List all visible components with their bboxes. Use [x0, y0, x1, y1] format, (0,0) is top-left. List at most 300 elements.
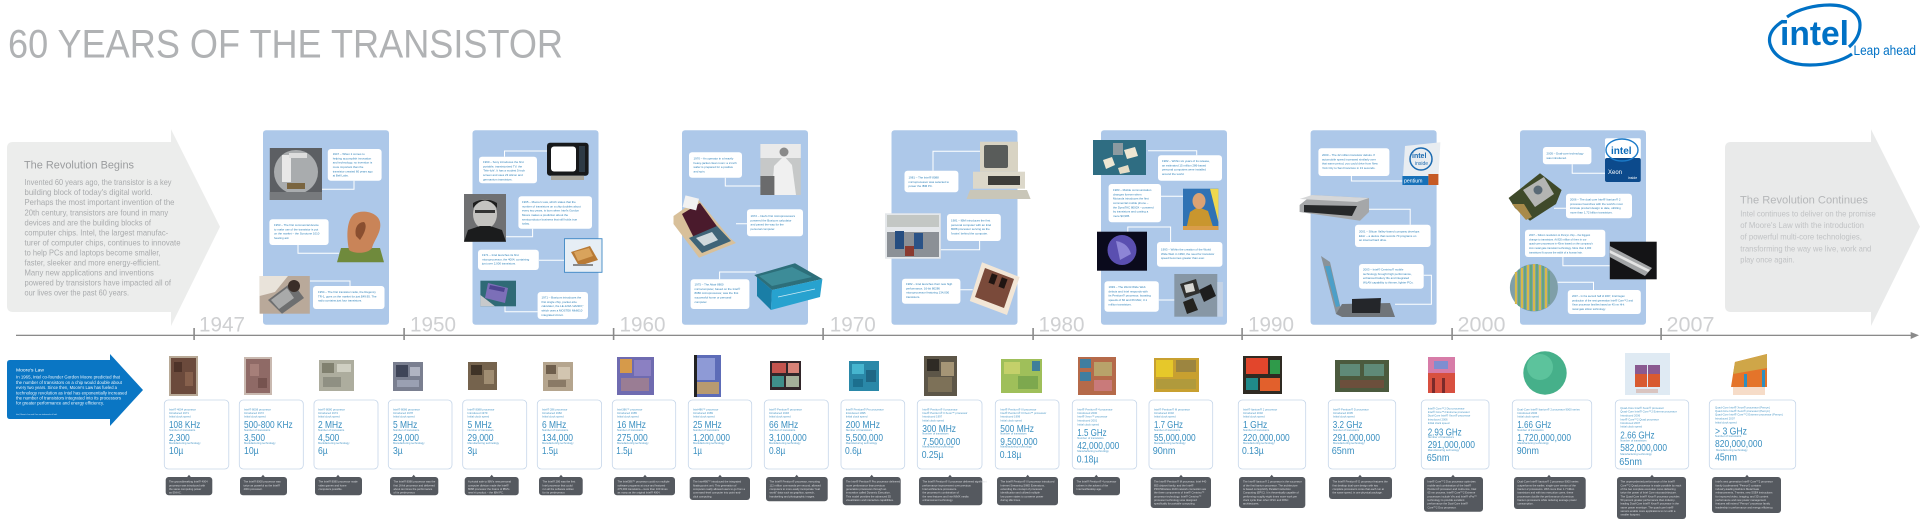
card: Pentium II: Intel® Pentium® II Xeon™ processor	[922, 411, 968, 415]
panel: The Revolution Begins arrow	[7, 129, 220, 326]
text: 1970: and spin.	[694, 169, 705, 173]
note: 386: as many as the original Intel® 4004.	[618, 491, 661, 495]
text: 1981 IBM: personal computer with an Intel	[951, 223, 992, 227]
note: 286: Intel processor that could	[542, 483, 573, 487]
card: Pentium: Intel® Pentium® processor	[769, 407, 802, 411]
card: Intel 8088	[463, 400, 527, 469]
card: Quad-Core Xeon: 2.66 GHz	[1620, 430, 1655, 442]
text: 1971 Busicom: which uses a MOSTEK Mk6010	[542, 308, 583, 312]
note: 8088: computer division made the Intel®	[468, 483, 509, 487]
text: 2001: an internal hard drive.	[1359, 238, 1387, 242]
text: 1983 mobile: mere $3,995.	[1113, 214, 1130, 218]
card: Intel 8008: Introduced 1972	[244, 411, 264, 415]
text: 1993 web: speed becomes greater than ever.	[1161, 256, 1205, 260]
text: 1993 Pentium: its Pentium® processor, boasting	[1108, 294, 1151, 298]
note: Quad-Core: of the two complete execution cores delivering	[1620, 487, 1676, 491]
panel: 1960-1970 events	[674, 130, 822, 325]
card: Intel386: Initial clock speed	[617, 415, 639, 419]
note: Core 2 Duo: technology to provide excellent	[1428, 498, 1465, 502]
text: 1993 Pentium: debuts and Intel responds with	[1108, 289, 1148, 293]
note: 8080: computers possible.	[318, 487, 343, 491]
card: Core 2 Duo: 2.93 GHz	[1428, 428, 1462, 438]
card: Pentium M: 90nm	[1153, 446, 1175, 457]
card: Quad-Core Xeon: 582,000,000	[1620, 443, 1667, 454]
card: Pentium Pro: Initial clock speed	[846, 415, 868, 419]
panel: The Revolution Continues arrow: of Moore's Law with the introduction	[1740, 221, 1864, 230]
chip: 8008 die	[244, 357, 272, 395]
card: Intel 8088: 29,000	[468, 433, 494, 444]
text: 1965: semiconductor business that still holds true	[522, 217, 578, 221]
card: Pentium D: 291,000,000	[1333, 433, 1380, 444]
card: Pentium M: 1.7 GHz	[1154, 420, 1183, 431]
card: Itanium 2: Intel® Itanium® 2 processor	[1243, 407, 1277, 411]
card: Quad-Core Xeon	[1615, 400, 1689, 469]
card: Pentium 4: Initial clock speed	[1077, 422, 1099, 426]
card: Penryn: 820,000,000	[1715, 439, 1763, 450]
card: Itanium 2 9000: Dual-Core Intel® Itanium® 2 processor 9000 series	[1517, 407, 1580, 411]
timeline axis with year ticks: 1947	[199, 313, 245, 337]
note: Pentium III: The Intel® Pentium® III processor introduced	[1000, 480, 1055, 484]
text: 2007 Penryn: quad-core processors in 45nm based on the company's	[1529, 242, 1593, 246]
text: 1975: successful home or personal	[694, 295, 732, 299]
card: Intel 286: Initial clock speed	[542, 415, 564, 419]
panel: The Revolution Begins arrow: devices and are the building blocks of	[24, 218, 152, 227]
panel: The Revolution Begins arrow: building block of today's digital world.	[24, 188, 152, 197]
card: Pentium: Manufacturing technology	[769, 441, 801, 445]
text: 1953	[269, 219, 329, 245]
note: Pentium III: Internet Streaming SIMD Extensions,	[1000, 483, 1045, 487]
note: Core 2 Duo: mobile and combination of the Intel®	[1428, 483, 1471, 487]
note: Penryn: family (codenamed "Penryn") contains	[1716, 483, 1762, 487]
note: Itanium 2	[1239, 475, 1305, 508]
card: Intel386: 1.5µ	[616, 446, 632, 457]
card: Intel386: 16 MHz	[617, 420, 646, 431]
note: Pentium D	[1329, 475, 1392, 499]
card: Intel386: Number of transistors	[617, 428, 644, 432]
text: 1982 286: 1982 – Within six years of its release,	[1162, 159, 1210, 163]
note: Pentium Pro	[843, 475, 901, 505]
panel: Moore's Law arrow: the number of transistors integrated into its processors	[16, 396, 122, 401]
card: Pentium D: Intel® Pentium® D processor	[1333, 407, 1369, 411]
card: Core 2 Duo: 291,000,000	[1428, 440, 1475, 451]
card: Penryn: Manufacturing technology	[1716, 448, 1748, 452]
text: 2003: enhanced battery life and integrated	[1363, 276, 1410, 280]
photo: first transistor replica	[270, 148, 322, 200]
card: Pentium II: 300 MHz	[922, 424, 956, 435]
note: Pentium Pro: This model provides the advanced 3D	[846, 494, 891, 498]
note: Pentium M: processor technology. Intel® Centrino™	[1154, 494, 1202, 498]
note: Itanium 2 9000: Dual-Core Intel® Itanium® 2 processor 9000 series	[1518, 480, 1579, 484]
photo: Sony TV	[547, 143, 589, 180]
text: 1982 286: around the world.	[1162, 172, 1185, 176]
text: 1947: more important than the	[333, 165, 364, 169]
panel: The Revolution Continues arrow: of powerful multi-core technologies,	[1740, 233, 1862, 242]
note: Core 2 Duo: Pentium® processor and multi-core, Intel	[1428, 487, 1477, 491]
card: Pentium II: Introduced 1997	[922, 415, 943, 419]
note: 386: software programs at once and featured	[618, 483, 666, 487]
card: Intel 8008	[239, 400, 303, 469]
text: 1971 Intel 4004: just over 2,000 transistors.	[481, 262, 516, 266]
panel: The Revolution Begins arrow: powered by transistors have impacted all of	[24, 279, 172, 288]
text: 1954: radio contains just four transistors.	[318, 299, 362, 303]
note: Itanium 2 9000	[1514, 475, 1586, 509]
card: Intel 8008: Number of transistors	[244, 428, 271, 432]
note: Pentium M: The Intel® Pentium® M processor, Intel 440	[1154, 480, 1207, 484]
text: 1981 IBM: 1981 – IBM introduces the first	[951, 218, 990, 222]
panel: The Revolution Begins arrow: Many new applications and inventions	[24, 268, 154, 277]
text: 2007 Penryn	[1525, 230, 1605, 257]
card: Pentium 4: Introduced 2000	[1077, 411, 1098, 415]
note: Pentium II: the new features and Intel MMX media	[922, 494, 969, 498]
chip: Quad-core die	[1625, 353, 1670, 395]
panel: The Revolution Continues arrow: Intel continues to deliver on the promise	[1740, 210, 1876, 219]
text: 1983 mobile: changes forever when	[1113, 192, 1142, 196]
note: Pentium III: during idle times.	[1000, 498, 1021, 502]
card: Itanium 2: 1 GHz	[1243, 420, 1267, 431]
panel: Moore's Law arrow	[7, 354, 143, 426]
text: 1975	[691, 279, 749, 309]
text: 1954: TR-1, goes on the market for just $49.95. The	[318, 294, 377, 298]
card: Pentium M	[1149, 400, 1213, 469]
card: Quad-Core Xeon: Initial clock speed	[1620, 425, 1642, 429]
card: Intel 4004: 10µ	[169, 446, 183, 457]
text: 1971 Intel 4004: 1971 – Intel launches its first	[482, 253, 519, 257]
card: Core 2 Duo: Introduced 2006	[1428, 417, 1448, 421]
card: Intel 8080: 4,500	[318, 433, 340, 444]
card: Intel 4004: Intel® 4004 processor	[169, 407, 196, 411]
card: Intel 8080: 2 MHz	[318, 420, 342, 431]
card: Itanium 2 9000: Introduced 2006	[1517, 411, 1538, 415]
panel: The Revolution Begins arrow: The Revolution Begins	[24, 160, 134, 172]
card: Pentium III: 9,500,000	[1000, 437, 1038, 448]
card: Pentium Pro	[841, 400, 905, 469]
note: Itanium 2 9000: consumption.	[1518, 502, 1534, 506]
text: 1965: number of transistors on a chip doubles about	[522, 204, 581, 208]
chip: 8080 die	[319, 360, 354, 391]
note: 286: for its predecessor.	[542, 491, 565, 495]
note: Pentium M: PRO/Wireless 2100 network connection are	[1154, 487, 1207, 491]
card: Intel 8008: 3,500	[244, 433, 265, 444]
text: 1960: screen and uses 23 silicon and	[483, 173, 523, 177]
card: Intel 286: Manufacturing technology	[542, 441, 574, 445]
card: Pentium 4: Intel® Pentium® 4 processor	[1077, 407, 1113, 411]
logo: Intel Leap ahead: intel	[1780, 15, 1849, 53]
note: Penryn: industry-leading Hafnium Metal Gate	[1716, 487, 1760, 491]
note: 8008	[240, 475, 287, 495]
card: Intel 8008: 500-800 KHz	[244, 420, 293, 431]
card: Pentium Pro: Number of transistors	[846, 428, 873, 432]
note: 4004: the same computing power	[169, 487, 201, 491]
card: Intel486: Manufacturing technology	[693, 441, 725, 445]
chip: 4004 die	[169, 356, 198, 396]
card: Penryn: Quad-Core Intel® Core™2 Extreme processor (Penryn)	[1715, 413, 1783, 417]
card: Itanium 2: Introduced 2002	[1243, 411, 1263, 415]
note: Itanium 2: is based on Explicitly Parallel Instruction	[1243, 487, 1291, 491]
note: Penryn: enhancements, T-series, new SSE4 instructions	[1716, 491, 1773, 495]
panel: Moore's Law arrow: Intel, Moore's Law and Core are trademarks of Intel.	[16, 413, 58, 416]
text: 1975: 8080 microprocessor, was the first	[694, 291, 739, 295]
photo: earth network	[1097, 232, 1147, 271]
card: Quad-Core Xeon: Intel® Core™2 Quad processor	[1620, 417, 1659, 421]
text: 1975: computer.	[694, 300, 707, 304]
card: Pentium: Introduced 1993	[769, 411, 789, 415]
card: Intel 8080: 6µ	[318, 446, 328, 457]
card: Intel 8088: Number of transistors	[468, 428, 494, 432]
chip: 486 die	[694, 355, 721, 397]
note: Pentium II: performance improvement over previous	[922, 483, 971, 487]
note: Core 2 Duo: Core™2 Duo processor.	[1428, 505, 1457, 509]
logo: Intel inside Pentium 4: inside	[1415, 161, 1428, 167]
card: Intel 8086: Introduced 1978	[393, 411, 413, 415]
text: 1972: powered the Busicom calculator	[750, 218, 792, 222]
card: Intel 286: Intel® 286 processor	[542, 407, 567, 411]
text: 1971 Busicom: first single chip, pocket-size	[542, 300, 577, 304]
note: Pentium Pro: generation processors through an	[846, 487, 887, 491]
card: Itanium 2 9000: 90nm	[1517, 446, 1539, 457]
note: Itanium 2 9000: Itanium processors while reducing average power	[1518, 498, 1577, 502]
card: Intel 8088: 3µ	[468, 446, 477, 457]
card: Intel 8086: Initial clock speed	[393, 415, 415, 419]
note: 486	[690, 475, 750, 500]
chip: Pentium 4 die	[1078, 357, 1116, 395]
card: Intel 8080: Intel® 8080 processor	[318, 407, 345, 411]
note: 286: The Intel® 286 was the first	[542, 480, 576, 484]
card: Intel 8086: Number of transistors	[393, 428, 420, 432]
card: Intel 286: Number of transistors	[542, 428, 569, 432]
note: Pentium III	[997, 475, 1058, 505]
text: 2003: WLAN capability to thinner, lighter PCs.	[1363, 280, 1414, 284]
note: 8086: first 16-bit processor and delivered	[394, 483, 435, 487]
note: Pentium II: The Intel® Pentium® II processor delivered significant	[922, 480, 987, 484]
text: 1971 Busicom: 1971 – Busicom introduces the	[542, 296, 582, 300]
card: Penryn	[1709, 400, 1796, 469]
note: Core 2 Duo: performance the Dual-Core Intel®	[1428, 502, 1468, 506]
panel: The Revolution Begins arrow: turer of computer chips, continues to innovate	[24, 238, 181, 247]
note: Quad-Core: smaller footprint.	[1620, 513, 1641, 517]
card: Itanium 2: 220,000,000	[1243, 433, 1290, 444]
text: 1975: 1975 – The Altair 8800	[694, 282, 724, 286]
text: 1983 mobile: by transistors and costing a	[1113, 210, 1149, 214]
text: 1953: hearing aid.	[274, 236, 289, 240]
card: Core 2 Duo: 65nm	[1427, 453, 1449, 464]
chip: Pentium III die	[1001, 359, 1042, 393]
timeline axis with year ticks: 1990	[1248, 313, 1294, 337]
note: Itanium 2: of the first Itanium processor. The architecture	[1243, 483, 1298, 487]
note: Pentium 4: The Intel® Pentium® 4 processor	[1076, 480, 1116, 484]
card: Pentium II	[917, 400, 982, 469]
text: 1971 Intel 4004: microprocessor, the 4004, containing	[482, 257, 530, 261]
text: 2006	[1566, 194, 1632, 218]
text: 2000: 2000 – The 42 million transistor debuts. If	[1322, 153, 1375, 157]
card: Itanium 2 9000: Manufacturing technology	[1517, 441, 1549, 445]
note: Pentium 4	[1073, 475, 1120, 495]
note: 8080	[315, 475, 362, 495]
card: Intel 4004: 108 KHz	[169, 420, 200, 431]
card: Intel386: Introduced 1985	[617, 411, 637, 415]
card: Intel 8008: Intel® 8008 processor	[244, 407, 271, 411]
timeline axis with year ticks: 1970	[830, 313, 876, 337]
note: Itanium 2: clock cycle than other CISC and RISC	[1243, 498, 1288, 502]
note: 8008: 4004 processor.	[244, 487, 263, 491]
card: Intel 8088: Initial clock speed	[468, 415, 490, 419]
note: Quad-Core: The Quad-Core Intel® Xeon® processor provides	[1620, 494, 1680, 498]
note: Pentium II	[919, 475, 987, 505]
panel: The Revolution Begins arrow: computer chips. Intel, the largest manufac-	[24, 228, 168, 237]
panel: The Revolution Begins arrow: our lives over the past 60 years.	[24, 289, 129, 298]
card: Intel 4004: Initial clock speed	[169, 415, 191, 419]
note: Pentium III: identification and utilized multiple	[1000, 491, 1040, 495]
note: 4004: as ENIAC.	[169, 491, 182, 495]
text: 2000: that same period, you could drive from New	[1322, 162, 1379, 166]
text: 1970: heavy-jacket clean room: a 2-inch	[694, 161, 737, 165]
text: 1981 IBM PC: 1981 – The Intel® 8088	[908, 176, 939, 180]
card: Pentium Pro: 200 MHz	[846, 420, 880, 431]
note: 8088	[465, 475, 519, 495]
text: 1971 Intel 4004	[478, 250, 539, 270]
chip: 286 die	[543, 362, 573, 391]
note: Itanium 2: architectures.	[1243, 502, 1259, 506]
text: 1993 web	[1157, 242, 1222, 267]
card: Quad-Core Xeon: Introduced 2006	[1620, 413, 1641, 417]
note: 8086: about ten times the performance	[394, 487, 433, 491]
photo: Busicom desk calculator	[674, 195, 736, 258]
note: Penryn: Intel's next generation Intel® Core™2 processor	[1716, 480, 1773, 484]
card: Pentium M: 55,000,000	[1154, 433, 1196, 444]
timeline axis with year ticks: 1960	[620, 313, 666, 337]
note: Pentium D: The Intel® Pentium® D processor features the	[1332, 480, 1388, 484]
card: Intel486: Initial clock speed	[693, 415, 715, 419]
card: Pentium M: Manufacturing technology	[1154, 441, 1186, 445]
card: Intel 4004: Manufacturing technology	[169, 441, 201, 445]
text: 2000: automobile speed increased similarly over	[1322, 157, 1376, 161]
text: 2005	[1543, 147, 1591, 164]
panel: The Revolution Continues arrow: transforming the way we live, work and	[1740, 244, 1872, 253]
card: Itanium 2 9000: Number of transistors	[1517, 428, 1544, 432]
note: Quad-Core	[1617, 475, 1686, 519]
card: Core 2 Duo: Initial clock speed	[1428, 421, 1450, 425]
card: Penryn: 45nm	[1715, 452, 1737, 464]
note: 8008: twice as powerful as the Intel®	[244, 483, 280, 487]
note: 4004: processor was introduced with	[169, 483, 206, 487]
photo: wafer operator	[760, 144, 801, 195]
logo: Intel inside Pentium 4	[1402, 142, 1440, 185]
text: 1960: portable, transistorized TV, the	[483, 164, 522, 168]
card: Pentium: Number of transistors	[769, 428, 796, 432]
panel: The Revolution Continues arrow: play once again.	[1740, 256, 1795, 265]
note: Penryn: features will extend "Penryn" processor family	[1716, 502, 1771, 506]
panel: The Revolution Begins arrow: to help PCs and laptops become smaller,	[24, 248, 160, 257]
text: 1970	[689, 152, 742, 178]
text: 1947: at Bell Labs.	[333, 174, 349, 178]
note: 386: 275,000 transistors—more than 100 times	[618, 487, 668, 491]
card: Penryn: Number of transistors	[1715, 434, 1742, 438]
card: Quad-Core Xeon: Quad-Core Intel® Core™2 Extreme processor	[1620, 410, 1677, 414]
note: 386: The Intel386™ processor could run multiple	[618, 480, 670, 484]
text: 2007 Penryn: 2007 – Silicon revolution to Penryn chip – the biggest	[1529, 233, 1590, 237]
note: Quad-Core: twice the power of Intel Core microarchitecture.	[1620, 491, 1677, 495]
panel: The Revolution Begins arrow: Perhaps the most important invention of the	[24, 198, 175, 207]
chip: Pentium M die	[1154, 358, 1199, 392]
note: Quad-Core: servers enable more applications to run with a	[1620, 509, 1676, 513]
card: Pentium III: Intel® Pentium® III processor	[1000, 407, 1036, 411]
card: Itanium 2 9000: 1,720,000,000	[1517, 433, 1571, 444]
photo: Pentium chips	[1174, 274, 1223, 317]
card: Core 2 Duo: Manufacturing technology	[1428, 448, 1460, 452]
card: Pentium III: 0.18µ	[1000, 450, 1021, 461]
text: 2006: processor launches with the world's most	[1570, 202, 1623, 206]
card: Pentium III: Initial clock speed	[1000, 418, 1022, 422]
text: 1972: personal computer.	[750, 227, 775, 231]
card: Intel 8088: Introduced 1979	[468, 411, 488, 415]
note: 486: command-level computer into point-and-	[693, 491, 741, 495]
text: 1971 Busicom	[538, 292, 588, 319]
card: Intel386: Intel386™ processor	[617, 407, 642, 411]
card: Intel 4004: Introduced 1971	[169, 411, 189, 415]
card: Pentium 4: Manufacturing technology	[1077, 449, 1109, 453]
text: 1960: 'Tele-Ichi'. It has a modest 5-inch	[483, 169, 525, 173]
note: Penryn: for improved video, imaging, and 3D content	[1716, 494, 1768, 498]
card: Itanium 2	[1238, 400, 1306, 469]
text: 2007 Penryn: Hi-k metal gate transistor technology. More than 2,000	[1529, 246, 1592, 250]
card: Pentium 4: Introduced 2001	[1077, 418, 1098, 422]
panel: The Revolution Begins arrow: Invented 60 years ago, the transistor is a key	[24, 178, 172, 187]
text: 1983 mobile: commercial mobile phone –	[1113, 201, 1149, 205]
card: Pentium Pro: 0.6µ	[845, 446, 862, 457]
card: Pentium 4: 0.18µ	[1077, 454, 1098, 466]
chip: Pentium II die	[924, 356, 957, 396]
text: 2003	[1359, 264, 1424, 289]
text: 1982 286: an estimated 15 million 286-based	[1162, 163, 1206, 167]
card: Itanium 2: Initial clock speed	[1243, 415, 1265, 419]
card: Itanium 2 9000: Initial clock speed	[1517, 415, 1539, 419]
text: 1960: germanium transistors.	[483, 177, 513, 181]
text: 1953: to make use of the transistor is put	[274, 227, 318, 231]
panel: The Revolution Begins arrow: 20th century, transistors are found in many	[24, 208, 169, 217]
card: Intel 8008: Initial clock speed	[244, 415, 266, 419]
card: Intel 286: 134,000	[542, 433, 573, 444]
card: Intel 8088: Intel® 8088 processor	[468, 407, 495, 411]
card: Intel 8008: 10µ	[244, 446, 259, 457]
note: 486: computers really allowed users to go from a	[693, 487, 745, 491]
text: 1982: transistors.	[906, 295, 920, 299]
card: Pentium 4: 42,000,000	[1077, 441, 1120, 452]
card: Pentium M: Introduced 2002	[1154, 411, 1174, 415]
note: Pentium: world" data such as graphics, speech,	[770, 491, 815, 495]
text: 1993 Pentium: 1993 – The World Wide Web	[1108, 285, 1146, 289]
panel: 1990-2000 events	[1300, 130, 1440, 325]
text: 2000: York City to San Francisco in 13 seconds.	[1322, 166, 1376, 170]
card: Intel 8080: Number of transistors	[318, 428, 345, 432]
card: Intel 8080: Initial clock speed	[318, 415, 340, 419]
note: Pentium Pro: more performance than previous	[846, 483, 885, 487]
text: 2001	[1355, 225, 1431, 247]
text: 2006: intricate product design to date, utilizing	[1570, 206, 1621, 210]
text: 1983 mobile: 1983 – Mobile communication	[1113, 188, 1152, 192]
note: 8088: 8088 processor the brains of IBM's	[468, 487, 510, 491]
text: 1947: and technology, no invention is	[333, 161, 373, 165]
text: 1982 286: personal computers were installed	[1162, 168, 1206, 172]
card: Quad-Core Xeon: Number of transistors	[1620, 438, 1647, 442]
note: Pentium II: enhancement technology.	[922, 498, 953, 502]
text: 1947: 1947 – When it comes to	[333, 152, 365, 156]
photo: IBM PC	[966, 142, 1031, 199]
chip: Itanium 2 die	[1243, 356, 1282, 394]
logo: Intel Xeon inside: intel	[1611, 146, 1632, 157]
card: Penryn: > 3 GHz	[1715, 426, 1747, 438]
note: 486: The Intel486™ introduced the integrated	[693, 480, 742, 484]
panel: Moore's Law arrow: every two years. Since then, Moore's Law has fueled a	[16, 385, 118, 390]
note: Pentium III: extending the concept of processor	[1000, 487, 1042, 491]
